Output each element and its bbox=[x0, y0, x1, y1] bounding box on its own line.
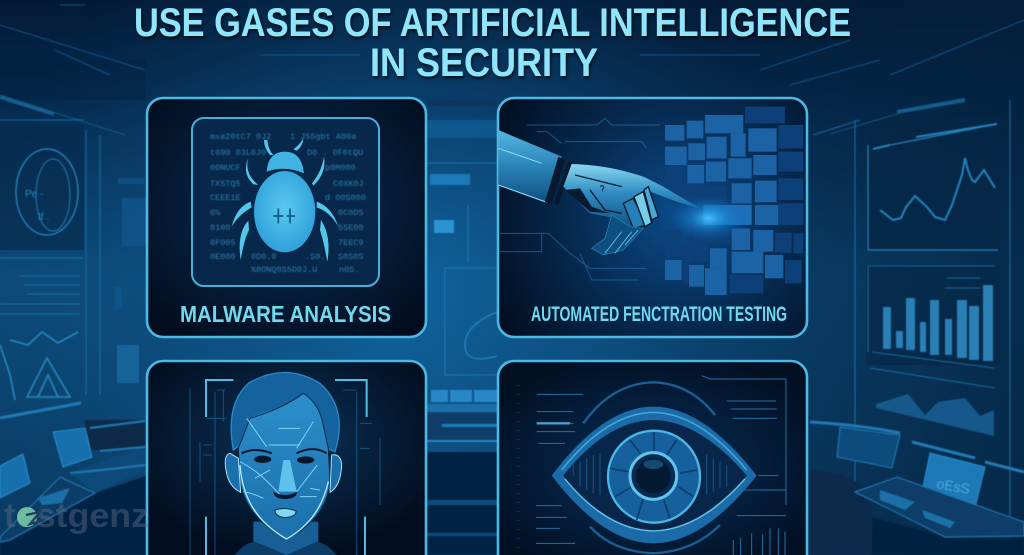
right line chart bbox=[868, 124, 998, 250]
binary code text: 0100 bbox=[210, 223, 230, 233]
icon: bug bbox=[232, 138, 338, 262]
binary code text: 5SE00 bbox=[338, 223, 364, 233]
panel: malware analysis bbox=[147, 98, 426, 337]
left data lines bbox=[0, 120, 100, 395]
binary code text: 0DNUCF bbox=[210, 163, 241, 173]
label: malware analysis: MALWARE ANALYSIS bbox=[180, 301, 391, 327]
panel: automated penetration testing bbox=[498, 98, 807, 337]
binary code text: 0C0D5 bbox=[338, 208, 364, 218]
hud lines bbox=[190, 388, 380, 555]
binary code text: 0F005 bbox=[210, 238, 236, 248]
left wall screens bbox=[0, 120, 146, 400]
right wall screens: oEsS bbox=[935, 475, 971, 497]
glow bbox=[668, 195, 748, 242]
binary code text: D0 . 0F6tQU bbox=[307, 148, 363, 158]
right bar chart bbox=[883, 285, 993, 361]
binary code text: S0S0S bbox=[338, 252, 364, 262]
binary code text: n0S. bbox=[339, 265, 359, 275]
binary code text: .S0. bbox=[305, 252, 325, 262]
title bbox=[134, 1, 851, 85]
title: IN SECURITY bbox=[370, 41, 598, 85]
left consoles bbox=[0, 403, 146, 555]
scan brackets bbox=[206, 380, 367, 555]
right wall screens bbox=[810, 100, 1024, 555]
icon: eye bbox=[552, 407, 757, 543]
binary code text: C0XK0J bbox=[333, 179, 364, 189]
label: automated penetration testing: AUTOMATED FENCTRATION TESTING bbox=[531, 303, 787, 326]
title: USE GASES OF ARTIFICIAL INTELLIGENCE bbox=[134, 1, 851, 45]
binary code text: 1 J55gbt A00a bbox=[290, 132, 356, 142]
binary code text: d 00S000 bbox=[325, 193, 366, 203]
left circular display bbox=[16, 149, 78, 235]
binary code text: t690 03L0J0 bbox=[210, 148, 266, 158]
binary code text: %0ONQ0S5D0J.U bbox=[251, 265, 317, 275]
left wave and triangles bbox=[0, 332, 78, 400]
watermark: testgenz: testgenz bbox=[4, 497, 149, 535]
hud readouts bbox=[518, 376, 786, 555]
brick wall bbox=[665, 107, 803, 295]
right consoles bbox=[810, 422, 1024, 472]
binary code text: 0% bbox=[210, 208, 221, 218]
binary code text: mxa20tC7 0J2 bbox=[210, 132, 271, 142]
ceiling lines bbox=[0, 5, 1024, 135]
icon: logo dot bbox=[17, 507, 44, 527]
binary code text bbox=[210, 132, 366, 275]
binary code text: 0E000 bbox=[210, 252, 236, 262]
panel: threat monitoring eye bbox=[498, 361, 807, 555]
binary code text: 7EEC9 bbox=[338, 238, 364, 248]
binary code text: CEEE1E bbox=[210, 193, 241, 203]
icon: face bbox=[225, 372, 342, 555]
binary code text: 0D0.0 bbox=[251, 252, 277, 262]
circuit lines bbox=[500, 118, 660, 280]
panel: facial recognition bbox=[147, 361, 426, 555]
icon: robot hand bbox=[498, 130, 700, 255]
left circular display: If . bbox=[38, 212, 49, 223]
right mountain chart bbox=[876, 394, 994, 436]
inner code screen bbox=[192, 118, 379, 286]
center strip bbox=[427, 100, 497, 555]
binary code text: p0M000 bbox=[325, 163, 356, 173]
left inner screens bbox=[115, 178, 146, 383]
binary code text: TX5TQ5 bbox=[210, 179, 241, 189]
left circular display: Pe - bbox=[25, 189, 43, 200]
